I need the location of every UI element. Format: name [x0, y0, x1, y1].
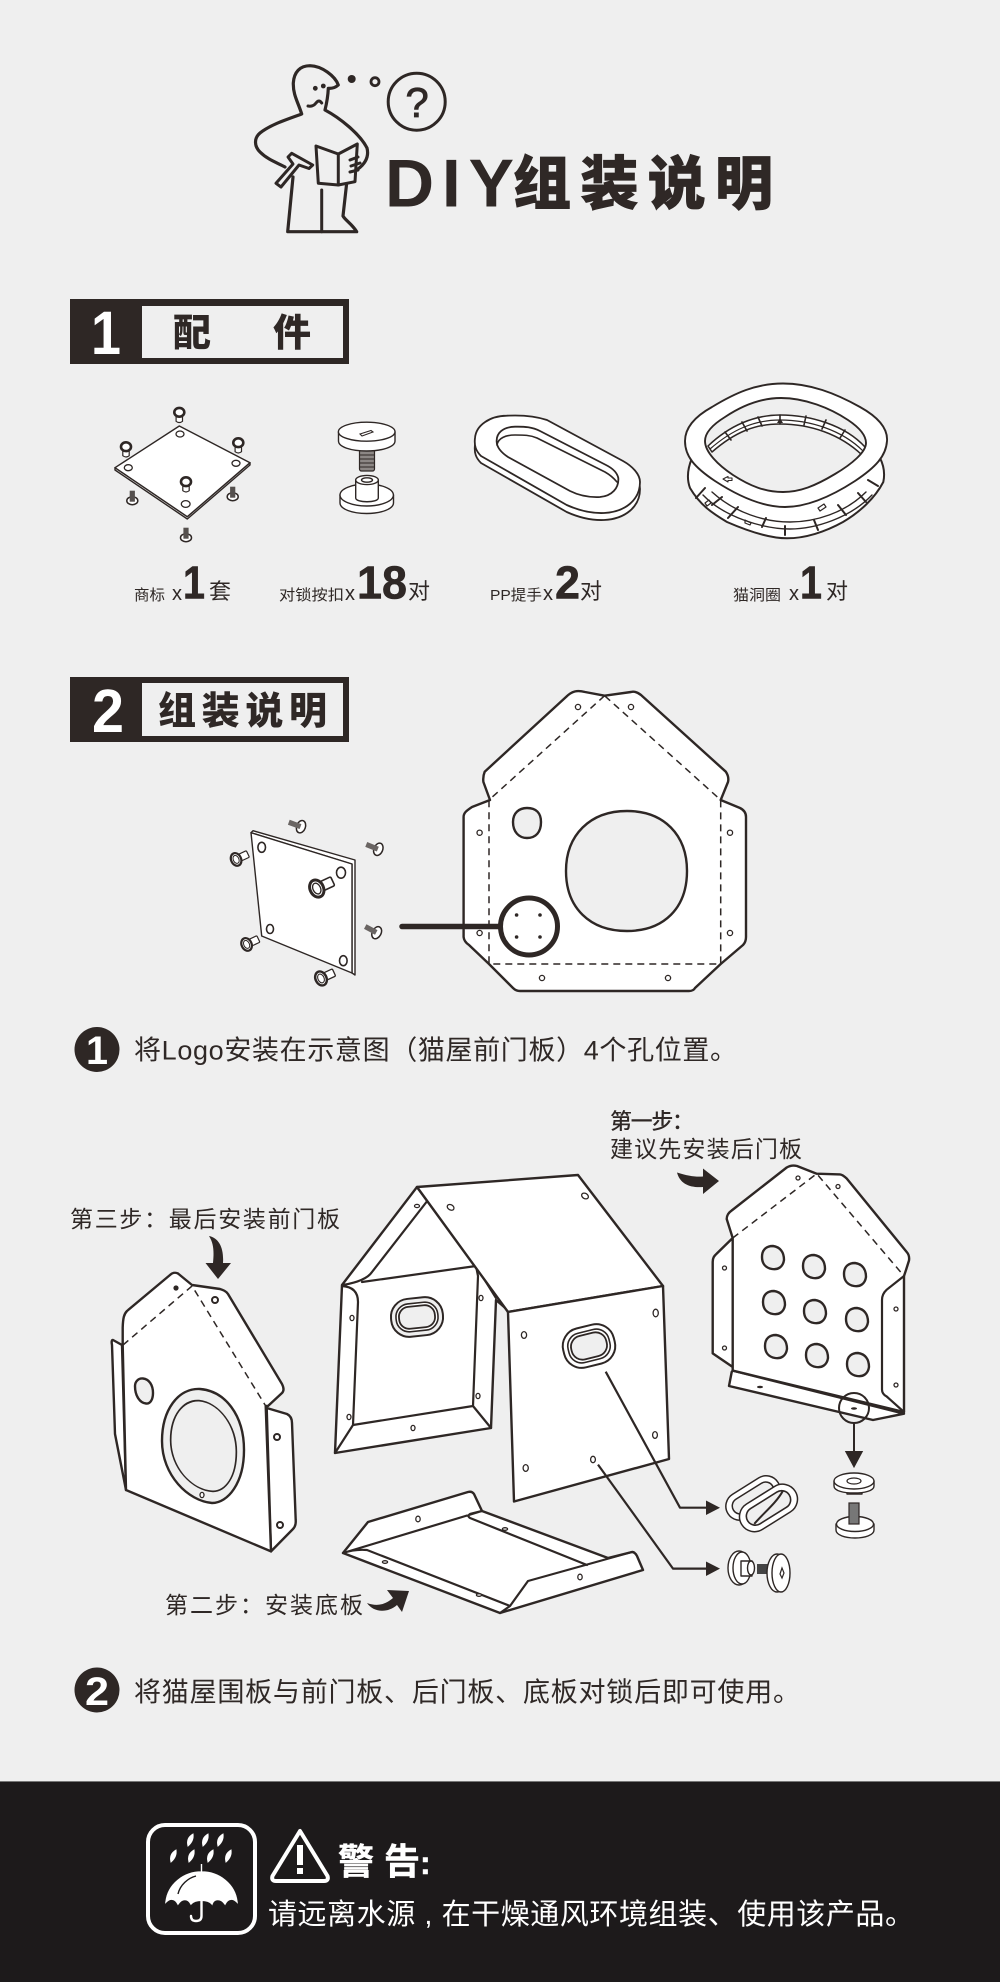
part: logo plate with pins and screws [115, 408, 250, 542]
illustration: back door panel [713, 1166, 909, 1423]
illustration: front door panel with logo position [402, 691, 746, 991]
panel: warning footer [0, 1781, 1000, 1982]
label: handle count: 对 [580, 579, 602, 604]
warning heading: 警告: [338, 1841, 431, 1882]
label: bolt count: 对锁按扣 [279, 587, 344, 604]
label: handle count: PP提手 [490, 587, 542, 604]
label: handle count: x [543, 583, 553, 605]
label: logo count: 1 [183, 556, 205, 608]
label: logo count: 商标 [134, 587, 165, 604]
title: 组装说明 [513, 152, 773, 217]
step 1 instruction: 将Logo安装在示意图（猫屋前门板）4个孔位置。 [134, 1036, 737, 1066]
part: lock button bolt pair [338, 422, 395, 514]
illustration: bottom plate [343, 1492, 643, 1613]
step 1 number badge [74, 1027, 120, 1073]
callout: step two bottom plate: 第二步：安装底板 [165, 1592, 363, 1618]
label: bolt count: 18 [357, 556, 407, 608]
icon: thinking man with manual [256, 66, 445, 232]
part: cat hole ring pair [685, 384, 887, 538]
arrow head: bolt [706, 1562, 720, 1576]
title [385, 146, 773, 222]
label: logo count [134, 556, 231, 608]
label: cat hole ring count: x [789, 583, 799, 605]
arrow: zoom to lock bolt [846, 1423, 862, 1466]
part: handle pair callout [721, 1470, 803, 1537]
callout: step one back door [610, 1109, 802, 1162]
arrow: step one [677, 1168, 719, 1194]
label: logo count: x [172, 583, 182, 605]
arrow: step three [206, 1236, 231, 1279]
label: cat hole ring count [733, 556, 848, 608]
arrow: shell handle to rings [606, 1372, 707, 1508]
icon: keep dry umbrella [148, 1825, 255, 1933]
part: lock bolt callout [834, 1473, 874, 1538]
heading: section 2 assembly [70, 677, 349, 745]
heading: section 2 assembly: 2 [92, 677, 124, 745]
part: bolt pair callout [728, 1551, 790, 1592]
label: bolt count: 对 [408, 579, 430, 604]
label: logo count: 套 [209, 579, 231, 604]
heading: section 1 parts [70, 299, 349, 367]
arrow: step two [367, 1590, 409, 1612]
label: cat hole ring count: 对 [826, 579, 848, 604]
callout: step one back door: 建议先安装后门板 [610, 1136, 802, 1162]
label: cat hole ring count: 猫洞圈 [733, 587, 781, 604]
step 1 number badge: 1 [86, 1029, 108, 1073]
arrow: shell hole to bolt [598, 1465, 707, 1569]
handle: side wall [559, 1320, 619, 1372]
heading: section 1 parts: 件 [273, 313, 311, 355]
illustration: house shell [335, 1175, 669, 1502]
callout: step three front door: 第三步：最后安装前门板 [70, 1206, 340, 1232]
icon: question mark: ? [405, 79, 429, 126]
warning body: 请远离水源 , 在干燥通风环境组装、使用该产品。 [268, 1898, 914, 1931]
label: handle count: 2 [555, 556, 580, 608]
heading: section 1 parts: 1 [91, 299, 121, 367]
heading: section 2 assembly: 组装说明 [158, 691, 327, 733]
part: PP handle ring [475, 415, 640, 520]
handle: back wall [389, 1295, 445, 1339]
step 2 number badge: 2 [85, 1670, 109, 1714]
label: handle count [490, 556, 602, 608]
label: bolt count: x [345, 583, 355, 605]
callout: step one back door: 第一步： [610, 1109, 694, 1134]
illustration: front door assembled view [112, 1273, 296, 1551]
arrow head: handle [706, 1500, 720, 1515]
step 2 instruction: 将猫屋围板与前门板、后门板、底板对锁后即可使用。 [134, 1678, 800, 1708]
title: DIY [385, 146, 514, 222]
step 2 number badge [74, 1668, 120, 1714]
icon: warning triangle [272, 1831, 328, 1881]
heading: section 1 parts: 配 [173, 313, 211, 355]
label: cat hole ring count: 1 [800, 556, 822, 608]
illustration: exploded logo plate [229, 816, 385, 987]
label: bolt count [279, 556, 430, 608]
